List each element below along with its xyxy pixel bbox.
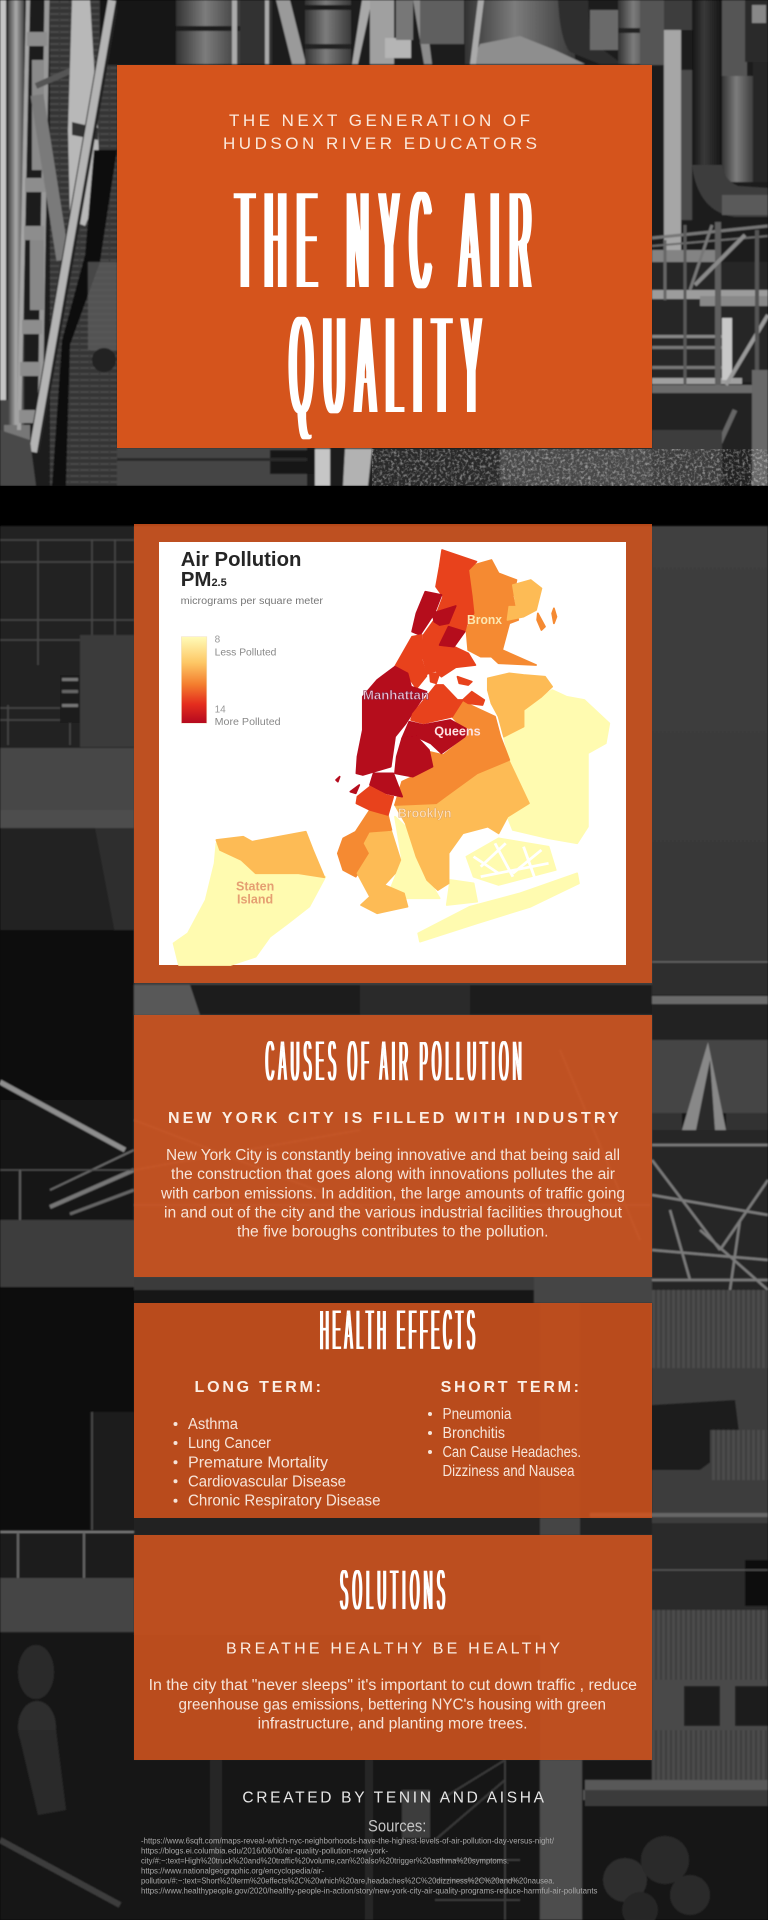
- sources list: https://www.nationalgeographic.org/encyclopedia/air-: [141, 1865, 324, 1875]
- body text: causes: in and out of the city and the various industrial facilities throughout: [164, 1204, 623, 1221]
- long term column: Premature Mortality: [188, 1454, 328, 1471]
- long term column: LONG TERM:: [194, 1379, 321, 1396]
- short term column: Pneumonia: [442, 1406, 512, 1423]
- map label Staten Island: Staten: [236, 880, 274, 894]
- short term column: Bronchitis: [442, 1425, 505, 1442]
- heading: solutions: SOLUTIONS: [340, 1557, 445, 1622]
- main title line 2: QUALITY: [290, 285, 481, 447]
- long term column: Lung Cancer: [188, 1435, 271, 1452]
- centre: [134, 526, 652, 985]
- map label Staten Island: Island: [237, 892, 273, 906]
- right column: [652, 526, 768, 962]
- map: PM2.5 choropleth of NYC boroughs: [174, 550, 609, 965]
- texture: foliage grain: [372, 449, 768, 486]
- map label Queens: Queens: [434, 725, 481, 739]
- sources list: pollution/#:~:text=Short%20term%20effects%2C%20which%20are,headaches%2C%20dizziness%2C%20and%20nausea.: [141, 1875, 555, 1885]
- subheading: breathe healthy: BREATHE HEALTHY BE HEALTHY: [226, 1640, 560, 1657]
- map label Bronx: Bronx: [467, 613, 502, 627]
- panel: solutions: [134, 1535, 652, 1760]
- organisation line 2: HUDSON RIVER EDUCATORS: [223, 134, 537, 153]
- body text: causes: [160, 1147, 625, 1240]
- short term column: [428, 1379, 581, 1480]
- sources heading: Sources:: [368, 1817, 426, 1836]
- map units: micrograms per square meter: [181, 596, 324, 607]
- map label Manhattan: Manhattan: [363, 688, 429, 702]
- panel: air pollution map: [134, 524, 652, 983]
- long term column: Cardiovascular Disease: [188, 1473, 346, 1490]
- right side: [640, 0, 664, 65]
- background photo: industrial plant (header): [0, 0, 768, 486]
- body text: solutions: infrastructure, and planting more trees.: [258, 1715, 528, 1732]
- short term column: SHORT TERM:: [441, 1379, 579, 1396]
- body text: causes: New York City is constantly being innovative and that being said all: [166, 1147, 620, 1164]
- bottom strip: [117, 448, 307, 486]
- legend colour scale: [181, 637, 207, 723]
- heading: causes: CAUSES OF AIR POLLUTION: [266, 1028, 521, 1093]
- legend high value: 14: [215, 704, 226, 715]
- panel: health effects: [134, 1297, 652, 1518]
- sources list: city/#:~:text=High%20truck%20and%20traffic%20volume,can%20also%20trigger%20asthma%20symptoms.: [141, 1855, 509, 1865]
- organisation line 1: THE NEXT GENERATION OF: [229, 111, 530, 130]
- map title: Air Pollution: [181, 548, 301, 571]
- body text: causes: the five boroughs contributes to the pollution.: [237, 1223, 548, 1240]
- heading: health effects: HEALTH EFFECTS: [320, 1297, 475, 1362]
- long term column: Chronic Respiratory Disease: [188, 1493, 380, 1510]
- body text: solutions: [149, 1677, 637, 1732]
- map label Brooklyn: Brooklyn: [398, 807, 451, 821]
- long term column: Asthma: [188, 1416, 238, 1433]
- map subtitle PM2.5: PM2.5: [181, 568, 227, 591]
- panel: causes of air pollution: [134, 1015, 652, 1277]
- short term column: Dizziness and Nausea: [442, 1463, 575, 1480]
- sources list: -https://www.6sqft.com/maps-reveal-which-nyc-neighborhoods-have-the-highest-levels-of-air-pollution-day-versus-night/: [141, 1835, 555, 1845]
- body text: causes: with carbon emissions. In addition, the large amounts of traffic going: [160, 1185, 625, 1202]
- background photo: industrial building (body): [0, 526, 768, 1920]
- body text: causes: the construction that goes along with innovations pollutes the air: [171, 1166, 615, 1183]
- black divider band: [0, 486, 768, 526]
- body text: solutions: greenhouse gas emissions, bettering NYC's housing with green: [178, 1696, 606, 1713]
- legend low value: 8: [215, 635, 221, 646]
- body text: solutions: In the city that "never sleeps" it's important to cut down traffic , reduce: [149, 1677, 637, 1694]
- long term column: [174, 1379, 380, 1510]
- legend high label: More Polluted: [215, 717, 281, 728]
- sources list: https://www.healthypeople.gov/2020/healthy-people-in-action/story/new-york-city-air-quality-programs-reduce-harmful-air-pollutants: [141, 1885, 598, 1895]
- short term column: Can Cause Headaches.: [442, 1444, 581, 1461]
- sources list: [141, 1835, 598, 1895]
- header panel: title card: [117, 65, 652, 448]
- sources list: https://blogs.ei.columbia.edu/2016/06/06/air-quality-pollution-new-york-: [141, 1845, 388, 1855]
- legend low label: Less Polluted: [215, 648, 276, 659]
- subheading: industry: NEW YORK CITY IS FILLED WITH INDUSTRY: [168, 1110, 619, 1127]
- left column: [0, 526, 134, 748]
- main title line 1: THE NYC AIR: [236, 160, 531, 322]
- top strip: [117, 0, 181, 64]
- credit line: CREATED BY TENIN AND AISHA: [242, 1790, 545, 1807]
